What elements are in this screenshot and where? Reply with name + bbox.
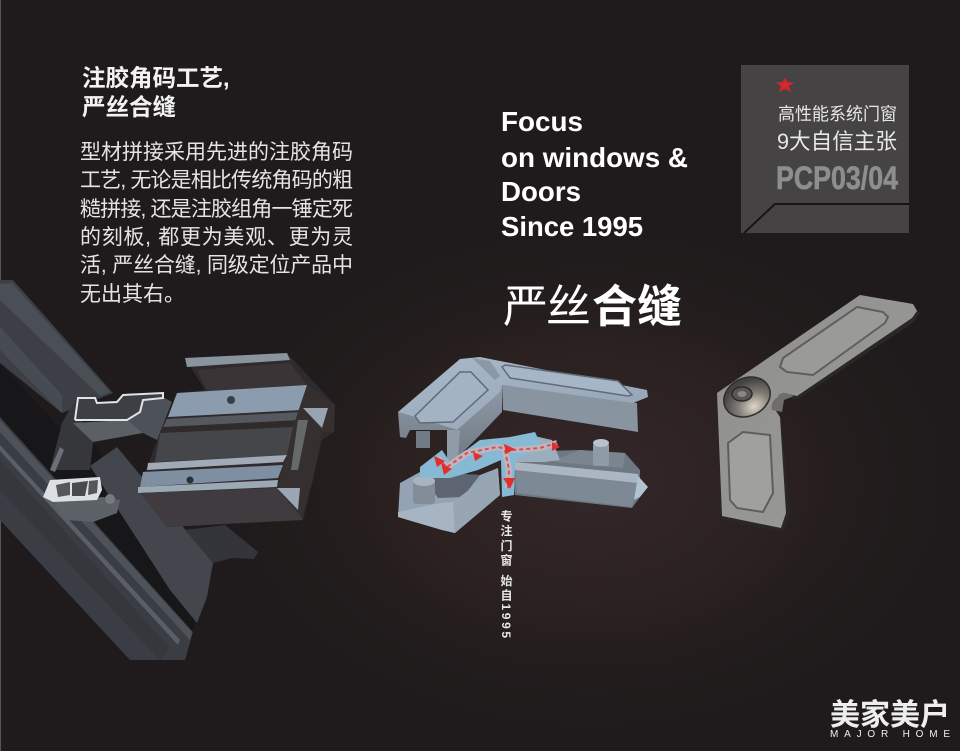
gap between rails (0, 363, 195, 632)
illustration: injection corner joint (398, 357, 648, 533)
heading: section title (82, 65, 230, 120)
upper small profile (73, 420, 143, 442)
heading: Focus on windows & Doors Since 1995: on windows & (501, 142, 688, 173)
heading: 严丝合缝 (503, 281, 682, 332)
badge text: PCP03/04 (776, 160, 898, 196)
illustration: window frame profile (0, 280, 335, 660)
upper piece top face (398, 357, 648, 430)
text block: description: 工艺, 无论是相比传统角码的粗 (80, 169, 353, 192)
upper recess (780, 307, 888, 375)
text block: description: 无出其右。 (80, 283, 185, 306)
lower rail (0, 417, 193, 660)
badge text (776, 104, 898, 196)
upper rail (0, 280, 113, 413)
lower piece, right (515, 467, 638, 507)
heading: Focus on windows & Doors Since 1995: Since 1995 (501, 211, 643, 242)
badge text: 9大自信主张 (777, 129, 897, 154)
red flow arrows (434, 442, 560, 489)
upper blue face (168, 385, 307, 417)
heading: Focus on windows & Doors Since 1995 (501, 106, 688, 242)
lower recess (728, 432, 773, 512)
text block: description: 糙拼接, 还是注胶组角一锤定死 (80, 198, 353, 221)
top rib (185, 353, 290, 367)
inner diagonal band (90, 447, 213, 623)
lower piece, left (398, 468, 500, 533)
recess left (415, 372, 488, 423)
knob (717, 370, 777, 424)
logo: Major Home: MAJOR HOME (830, 729, 950, 740)
bottom face (140, 488, 303, 527)
notch (772, 393, 794, 412)
badge notch line (744, 204, 909, 233)
badge text: 高性能系统门窗 (778, 104, 897, 124)
logo: Major Home: 美家美户 (830, 699, 950, 732)
middle dark face (155, 427, 293, 462)
text block: description: 型材拼接采用先进的注胶角码 (80, 141, 353, 164)
text block: description (80, 141, 353, 306)
icon: red star (778, 79, 792, 91)
lower blue face (140, 465, 283, 487)
lower small profile (53, 497, 120, 522)
panel: badge (741, 65, 909, 233)
lower piece, right backing (510, 450, 640, 508)
support wall behind profile (50, 397, 93, 470)
glue channel (420, 432, 542, 497)
illustration: corner key plate (717, 295, 920, 532)
heading: 严丝合缝: 合缝 (592, 281, 682, 332)
text block: description: 活, 严丝合缝, 同级定位产品中 (80, 254, 353, 277)
heading: Focus on windows & Doors Since 1995: Focus (501, 106, 583, 137)
upper piece sides (398, 385, 502, 458)
lower boss (413, 480, 435, 504)
heading: 严丝合缝: 严丝 (503, 281, 591, 332)
recess right (502, 365, 632, 396)
heading: section title: 严丝合缝 (82, 94, 176, 120)
heading: section title: 注胶角码工艺, (82, 65, 230, 91)
injection path (437, 443, 557, 467)
right end (277, 385, 335, 518)
text block: description: 的刻板, 都更为美观、更为灵 (80, 226, 353, 249)
heading: Focus on windows & Doors Since 1995: Doors (501, 176, 581, 207)
vertical slogan: 专注门窗 始自1995 (499, 509, 513, 641)
main block, dark body (138, 353, 335, 527)
